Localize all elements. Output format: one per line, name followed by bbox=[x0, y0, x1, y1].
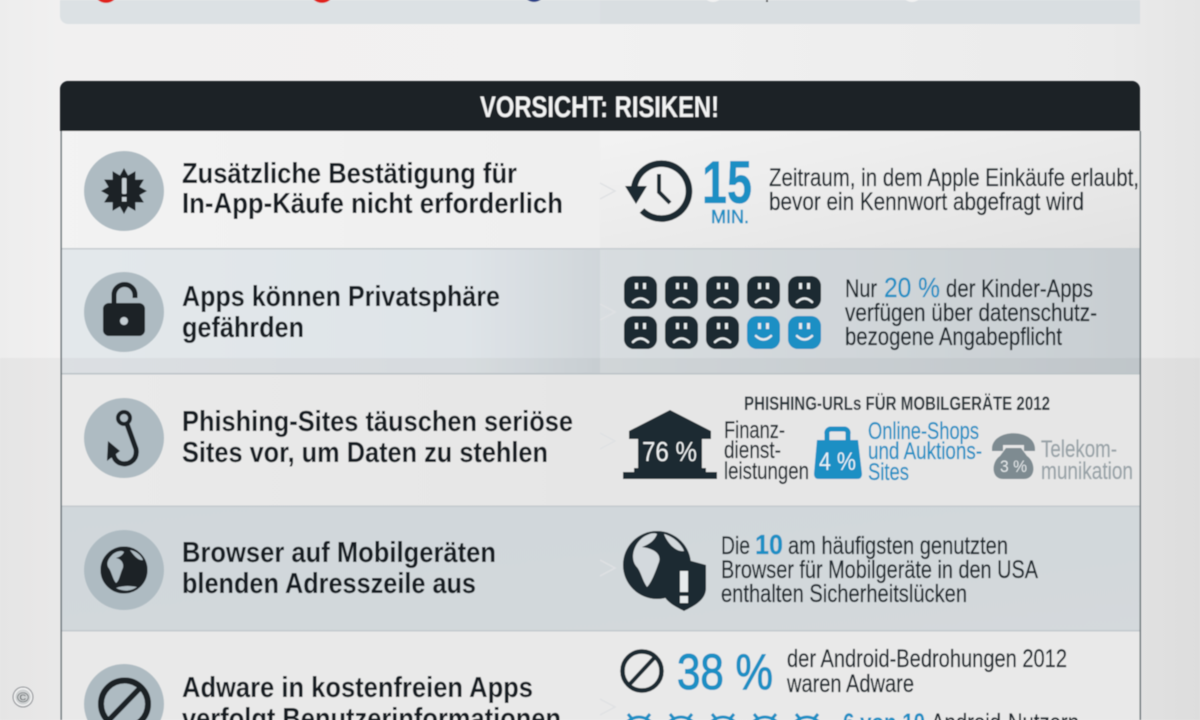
icon: android row bbox=[627, 714, 819, 720]
icon: copyright badge: © bbox=[17, 689, 30, 705]
top strip panel bbox=[60, 0, 1140, 24]
text: row 3 heading: Sites vor, um Daten zu stehlen bbox=[182, 437, 548, 469]
text: row 2 detail: Nur bbox=[845, 275, 877, 303]
text: row 4 detail: Die bbox=[721, 532, 750, 560]
icon: telephone 3 % bbox=[992, 433, 1035, 479]
text: adware share: der Android-Bedrohungen 2012 bbox=[787, 645, 1067, 673]
text: row 5 heading bbox=[182, 672, 561, 720]
text: row 4 detail: Browser für Mobilgeräte in den USA bbox=[721, 556, 1038, 584]
text: row 1 heading bbox=[182, 158, 563, 220]
row 2: privacy bbox=[84, 272, 1097, 352]
text: adware share: waren Adware bbox=[786, 670, 914, 698]
text: row 2 detail: der Kinder-Apps bbox=[946, 275, 1093, 303]
heading: VORSICHT: RISIKEN! bbox=[480, 91, 719, 124]
stat: 15 minutes: 15 bbox=[702, 149, 752, 216]
icon: small prohibition sign bbox=[622, 652, 662, 690]
icon: bank 76 % bbox=[623, 410, 717, 479]
row 5: adware bbox=[84, 644, 1079, 720]
text: row 1 detail bbox=[769, 164, 1139, 216]
text: row 2 detail: verfügen über datenschutz- bbox=[845, 299, 1097, 327]
text: row 4 heading: blenden Adresszeile aus bbox=[182, 568, 476, 600]
text: row 2 heading bbox=[182, 281, 500, 344]
label: telecommunications bbox=[1041, 436, 1133, 485]
text: android users bbox=[843, 709, 1079, 720]
text: row 4 detail: enthalten Sicherheitslücken bbox=[721, 580, 967, 608]
text: row 2 detail bbox=[845, 272, 1097, 351]
row 4: browsers bbox=[84, 529, 1038, 611]
text: row 4 detail bbox=[721, 529, 1038, 608]
icon: copyright badge bbox=[12, 686, 34, 708]
text: row 2 detail: 20 % bbox=[884, 272, 940, 303]
stat: 38 %: 38 % bbox=[677, 644, 773, 700]
text: row 1 detail: bevor ein Kennwort abgefragt wird bbox=[769, 188, 1084, 216]
text: row 3 heading bbox=[182, 406, 573, 469]
icon: globe with shield bbox=[623, 531, 706, 611]
header bar bbox=[60, 81, 1140, 131]
label: online shops: Sites bbox=[868, 459, 909, 486]
text: row 3 heading: Phishing-Sites täuschen seriöse bbox=[182, 406, 573, 438]
icon: shopping bag 4 % bbox=[814, 429, 862, 479]
text: row 1 heading: Zusätzliche Bestätigung für bbox=[182, 158, 517, 190]
label: financial services: leistungen bbox=[724, 458, 809, 485]
row 3: phishing bbox=[84, 394, 1133, 486]
text: row 2 heading: gefährden bbox=[182, 312, 304, 344]
label: telecommunications: munikation bbox=[1041, 458, 1133, 485]
icon: prohibition sign bbox=[84, 664, 164, 720]
text: row 2 detail: bezogene Angabepflicht bbox=[845, 323, 1062, 351]
icon: face grid bbox=[624, 276, 821, 349]
text: row 4 detail: am häufigsten genutzten bbox=[788, 532, 1008, 560]
icon: open padlock bbox=[84, 272, 164, 352]
text: row 5 heading: Adware in kostenfreien Apps bbox=[182, 672, 533, 704]
icon: warning burst bbox=[84, 151, 164, 231]
stat: 15 minutes: MIN. bbox=[711, 207, 749, 227]
icon: bank 76 %: 76 % bbox=[642, 436, 697, 467]
label: online shops bbox=[868, 418, 982, 486]
chart title: phishing URLs: PHISHING-URLs FÜR MOBILGERÄTE 2012 bbox=[744, 394, 1050, 415]
label: online shops: Online-Shops bbox=[868, 418, 979, 445]
label: financial services bbox=[724, 417, 809, 485]
label: online shops: und Auktions- bbox=[868, 438, 982, 465]
text: row 4 detail: 10 bbox=[755, 529, 783, 560]
icon: shopping bag 4 %: 4 % bbox=[819, 448, 856, 476]
text: row 1 heading: In-App-Käufe nicht erforderlich bbox=[182, 188, 563, 220]
row arrows bbox=[600, 183, 615, 715]
icon: fish hook bbox=[84, 398, 164, 478]
stat: 15 minutes bbox=[702, 149, 752, 227]
text: row 4 heading bbox=[182, 537, 496, 600]
label: telecommunications: Telekom- bbox=[1041, 436, 1117, 463]
icon: telephone 3 %: 3 % bbox=[1000, 457, 1027, 476]
icon: history clock bbox=[625, 164, 689, 219]
icon: globe bbox=[84, 530, 164, 610]
label: financial services: dienst- bbox=[724, 437, 781, 464]
text: adware share bbox=[786, 645, 1067, 698]
label: financial services: Finanz- bbox=[724, 417, 785, 444]
text: row 2 heading: Apps können Privatsphäre bbox=[182, 281, 500, 313]
text: row 4 heading: Browser auf Mobilgeräten bbox=[182, 537, 496, 569]
row 1: in-app purchases bbox=[84, 149, 1139, 231]
